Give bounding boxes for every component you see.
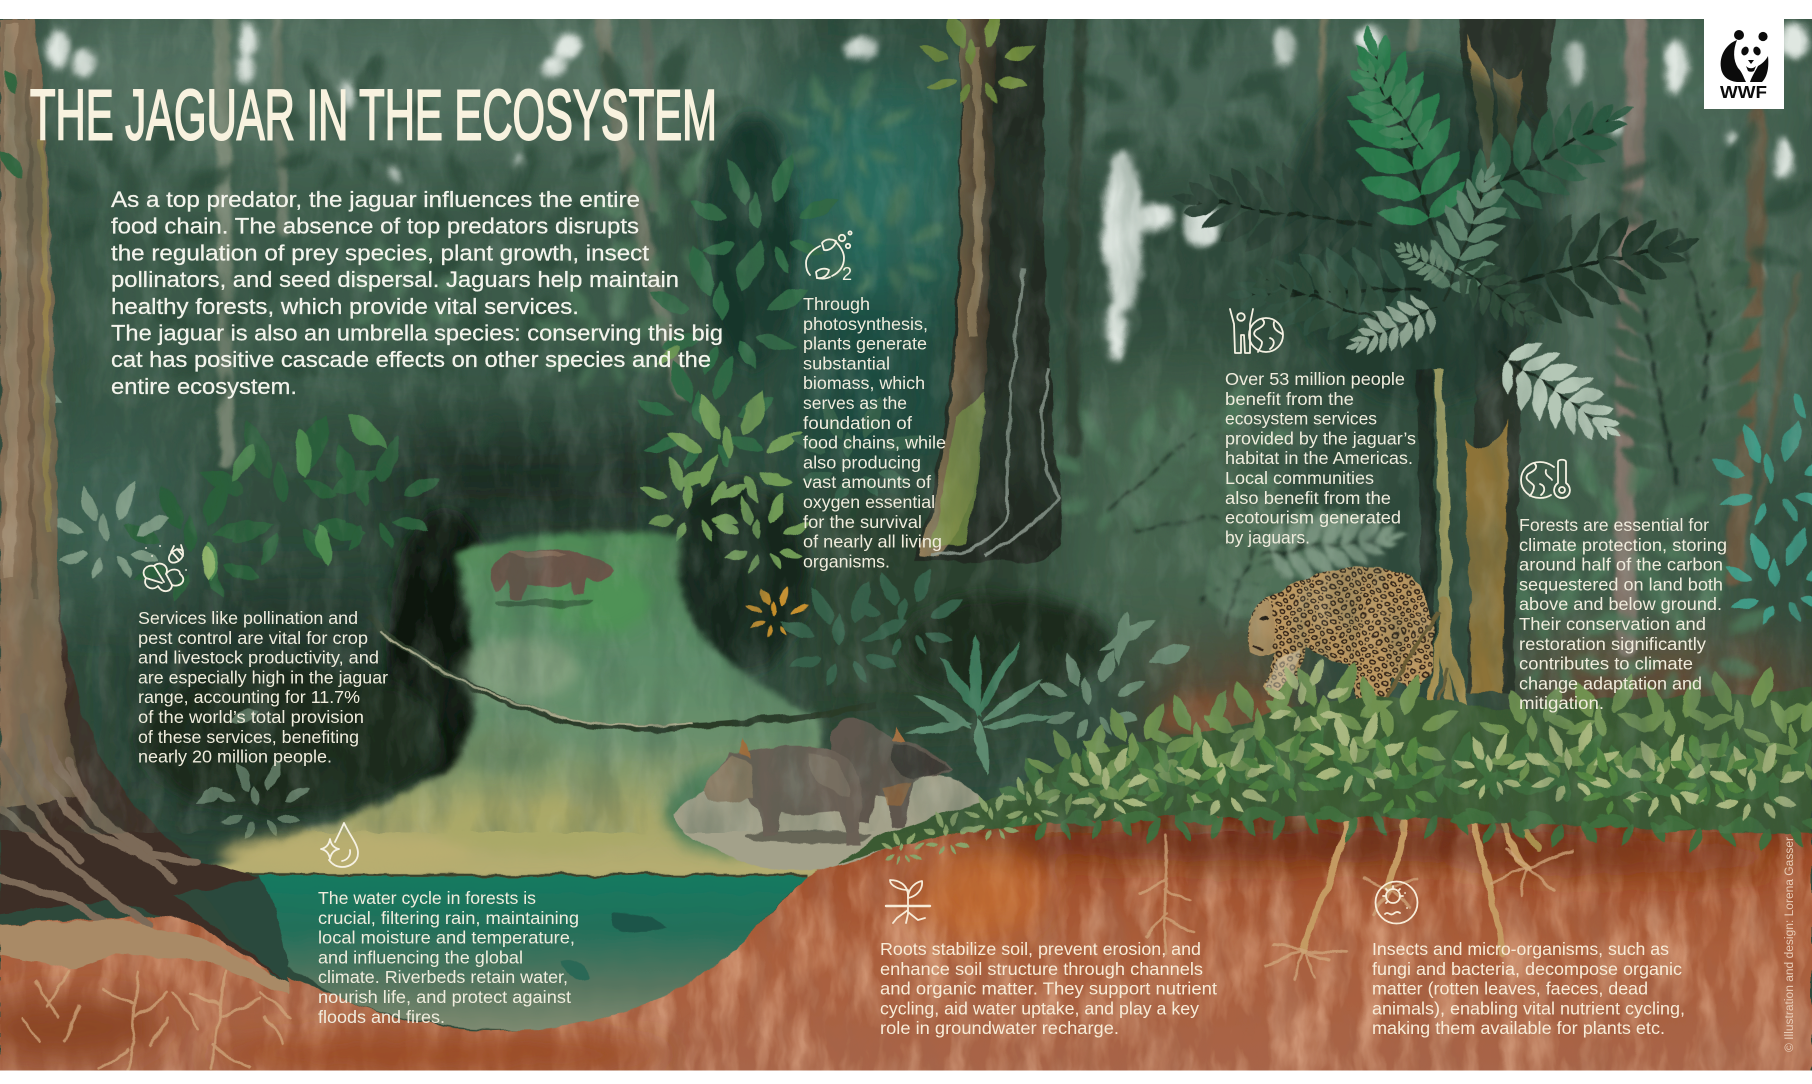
dark mid foliage masses	[139, 58, 1560, 815]
peccaries	[703, 719, 955, 844]
text: photosynthesis: serves as the	[803, 393, 907, 413]
text: insects and micro-organisms: animals), enabling vital nutrient cycling,	[1372, 998, 1685, 1018]
text: insects and micro-organisms: fungi and bacteria, decompose organic	[1372, 959, 1682, 979]
text: water cycle: crucial, filtering rain, maintaining	[318, 908, 579, 928]
text: pollination: of the world’s total provision	[138, 707, 364, 727]
left buttress tree	[0, 18, 289, 996]
text: pollination: nearly 20 million people.	[138, 747, 332, 767]
text: pollination: and livestock productivity, and	[138, 648, 379, 668]
distant trunks	[222, 18, 1797, 647]
stilt roots	[1304, 601, 1537, 953]
intro text block: As a top predator, the jaguar influences the entire	[111, 187, 640, 212]
soil rootlets	[23, 838, 1572, 1069]
icon: oxygen cycle: 2	[842, 264, 852, 284]
text: climate	[1519, 515, 1727, 713]
ground foliage band	[832, 658, 1812, 867]
text: people benefit: benefit from the	[1225, 389, 1354, 409]
background leaf texture	[41, 0, 1812, 703]
text: people benefit: Local communities	[1225, 468, 1374, 488]
text: pollination: of these services, benefiting	[138, 727, 359, 747]
text: roots: enhance soil structure through channels	[880, 959, 1203, 979]
intro text block: pollinators, and seed dispersal. Jaguars help maintain	[111, 267, 679, 292]
text: pollination: are especially high in the jaguar	[138, 667, 388, 687]
text: climate: mitigation.	[1519, 693, 1604, 713]
text: climate: sequestered on land both	[1519, 574, 1723, 594]
jaguar	[1247, 568, 1434, 712]
text: photosynthesis: organisms.	[803, 551, 890, 571]
WWF logo: WWF	[1720, 82, 1767, 102]
palm crown	[1164, 8, 1711, 647]
water cross-section	[191, 875, 805, 1029]
text: roots: and organic matter. They support nutrient	[880, 979, 1217, 999]
text: photosynthesis: substantial	[803, 353, 890, 373]
text: climate: restoration significantly	[1519, 634, 1706, 654]
text: climate: around half of the carbon	[1519, 555, 1723, 575]
text: pollination: Services like pollination and	[138, 608, 358, 628]
text: roots	[880, 939, 1217, 1038]
fern fronds mid right	[1106, 180, 1764, 628]
text: roots: Roots stabilize soil, prevent erosion, and	[880, 939, 1201, 959]
text: people benefit: Over 53 million people	[1225, 369, 1405, 389]
text: photosynthesis: foundation of	[803, 413, 912, 433]
central big tree	[913, 6, 1062, 563]
left foliage	[55, 394, 440, 839]
text: climate: change adaptation and	[1519, 673, 1702, 693]
text: people benefit: by jaguars.	[1225, 527, 1310, 547]
text: photosynthesis: photosynthesis,	[803, 314, 928, 334]
sky patches	[46, 23, 1810, 359]
text: climate: climate protection, storing	[1519, 535, 1727, 555]
text: people benefit: ecosystem services	[1225, 409, 1377, 429]
bromeliad	[904, 611, 1294, 775]
text: climate: contributes to climate	[1519, 654, 1693, 674]
text: photosynthesis: also producing	[803, 452, 921, 472]
intro text block: cat has positive cascade effects on other species and the	[111, 347, 711, 372]
centre foliage	[634, 150, 963, 689]
text: insects and micro-organisms: making them available for plants etc.	[1372, 1018, 1665, 1038]
icon: oxygen cycle	[806, 231, 852, 284]
text: people benefit	[1225, 369, 1416, 547]
text: water cycle	[318, 888, 579, 1027]
text: photosynthesis: biomass, which	[803, 373, 925, 393]
text: water cycle: floods and fires.	[318, 1007, 445, 1027]
painterly overlay	[0, 0, 1812, 832]
text: photosynthesis: of nearly all living	[803, 532, 942, 552]
intro text block: food chain. The absence of top predators disrupts	[111, 214, 639, 238]
text: photosynthesis: plants generate	[803, 334, 927, 354]
icon: micro-organisms	[1376, 882, 1418, 924]
far tapir	[491, 549, 612, 607]
icon: pollination bee and flower	[144, 545, 186, 591]
text: pollination	[138, 608, 388, 767]
text: water cycle: nourish life, and protect against	[318, 987, 571, 1007]
stream	[191, 532, 878, 878]
sandbar	[675, 770, 985, 870]
text: people benefit: ecotourism generated	[1225, 508, 1401, 528]
text: water cycle: and influencing the global	[318, 947, 523, 967]
text: people benefit: provided by the jaguar’s	[1225, 428, 1416, 448]
copyright credit: © Illustration and design: Lorena Gasser	[1784, 837, 1796, 1052]
text: photosynthesis: vast amounts of	[803, 472, 931, 492]
text: insects and micro-organisms	[1372, 939, 1685, 1038]
intro text block: entire ecosystem.	[111, 374, 297, 399]
text: climate: above and below ground.	[1519, 594, 1722, 614]
text: climate: Forests are essential for	[1519, 515, 1709, 535]
text: pollination: range, accounting for 11.7%	[138, 687, 360, 707]
text: photosynthesis: oxygen essential	[803, 492, 935, 512]
text: photosynthesis: for the survival	[803, 512, 922, 532]
icon: seedling with roots	[886, 880, 930, 923]
soil	[0, 809, 1812, 1084]
text: photosynthesis: food chains, while	[803, 433, 946, 453]
text: people benefit: habitat in the Americas.	[1225, 448, 1413, 468]
text: people benefit: also benefit from the	[1225, 488, 1391, 508]
intro text block: healthy forests, which provide vital services.	[111, 294, 579, 319]
text: roots: role in groundwater recharge.	[880, 1018, 1119, 1038]
text: photosynthesis: Through	[803, 294, 870, 314]
text: roots: cycling, aid water uptake, and play a key	[880, 998, 1199, 1018]
text: insects and micro-organisms: Insects and micro-organisms, such as	[1372, 939, 1669, 959]
icon: globe and thermometer	[1521, 460, 1570, 498]
right brown trunks behind palm	[1458, 18, 1554, 693]
icon: people and globe	[1230, 309, 1283, 353]
fish	[562, 913, 668, 979]
text: insects and micro-organisms: matter (rotten leaves, faeces, dead	[1372, 979, 1648, 999]
text: photosynthesis	[803, 294, 946, 571]
WWF logo	[1704, 18, 1784, 109]
icon: water drop	[321, 823, 358, 867]
text: water cycle: climate. Riverbeds retain water,	[318, 967, 568, 987]
right teal foliage	[1709, 390, 1812, 628]
intro text block: The jaguar is also an umbrella species: conserving this big	[111, 320, 723, 346]
text: water cycle: The water cycle in forests is	[318, 888, 536, 908]
text: pollination: pest control are vital for crop	[138, 628, 368, 648]
text: climate: Their conservation and	[1519, 614, 1706, 634]
intro text block: the regulation of prey species, plant growth, insect	[111, 240, 649, 266]
intro text block	[111, 187, 723, 399]
text: water cycle: local moisture and temperature,	[318, 928, 575, 948]
title: THE JAGUAR IN THE ECOSYSTEM	[30, 76, 717, 156]
